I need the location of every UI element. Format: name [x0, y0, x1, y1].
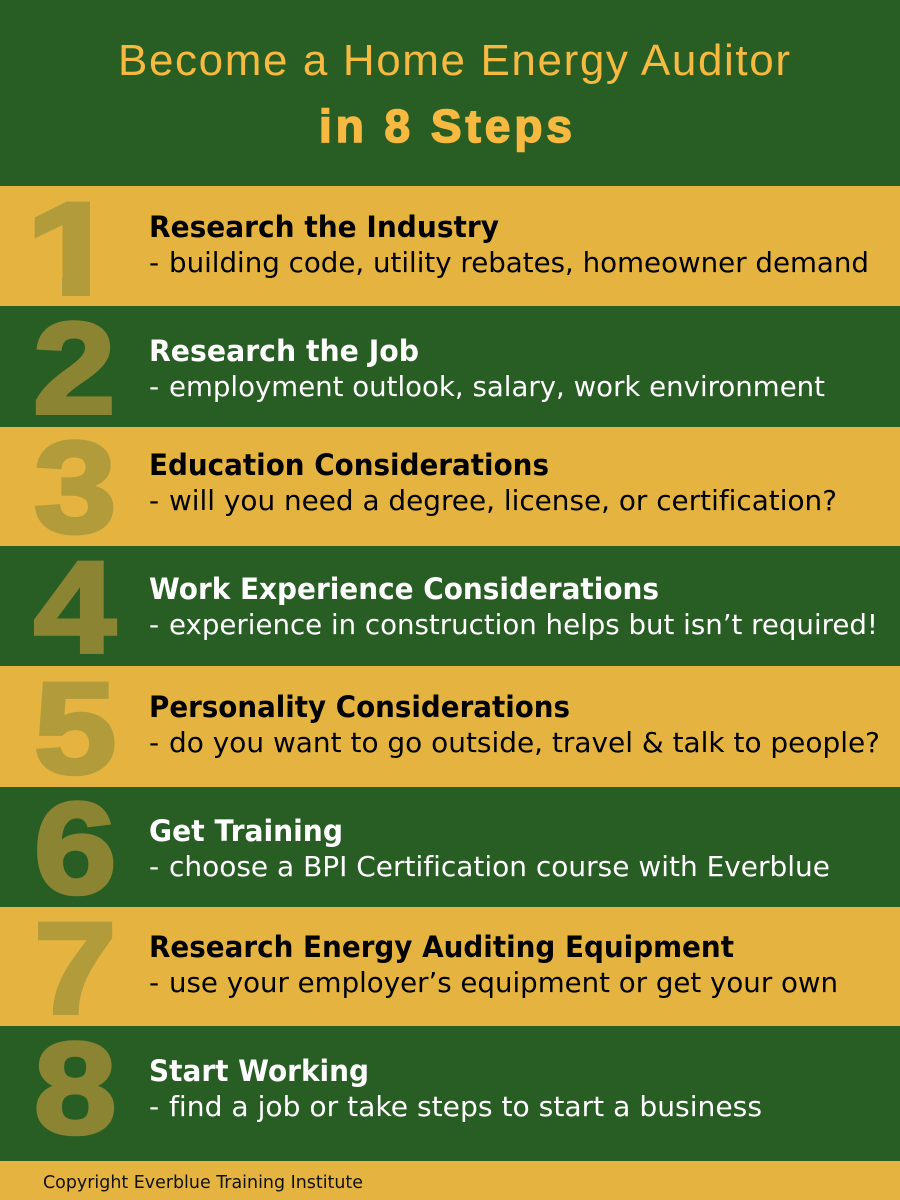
step 8: - — [149, 1090, 159, 1123]
step 5: 5 — [34, 655, 116, 801]
step 4: - — [149, 608, 159, 641]
step 8: Start Working — [149, 1054, 369, 1088]
step 8: find a job or take steps to start a business — [169, 1090, 762, 1123]
step 7: Research Energy Auditing Equipment — [149, 930, 734, 964]
step 5 — [0, 655, 900, 801]
copyright footer: Copyright Everblue Training Institute — [43, 1172, 363, 1193]
step 8 — [0, 1015, 900, 1161]
step 4: 4 — [34, 535, 116, 680]
step 1: - — [149, 246, 159, 279]
step 1: Research the Industry — [149, 210, 499, 244]
step 4: experience in construction helps but isn’t required! — [169, 608, 878, 641]
step 4: Work Experience Considerations — [149, 572, 659, 606]
step 2 — [0, 295, 900, 441]
title: Become a Home Energy Auditor — [118, 36, 790, 85]
step 1: 1 — [27, 177, 121, 322]
step 5: - — [149, 726, 159, 759]
step 1 — [0, 186, 900, 306]
step 2: employment outlook, salary, work environment — [169, 370, 825, 403]
copyright footer — [0, 1161, 900, 1200]
step 3: 3 — [34, 414, 116, 560]
step 3: Education Considerations — [149, 448, 549, 482]
title: in 8 Steps — [319, 100, 572, 152]
step 7 — [0, 895, 900, 1041]
step 4 — [0, 535, 900, 680]
step 3 — [0, 414, 900, 560]
step 2: 2 — [33, 295, 115, 441]
step 5: do you want to go outside, travel & talk to people? — [169, 726, 880, 759]
step 6 — [0, 775, 900, 921]
step 5: Personality Considerations — [149, 690, 570, 724]
step 6: - — [149, 850, 159, 883]
step 3: will you need a degree, license, or certification? — [169, 484, 837, 517]
step 1: building code, utility rebates, homeowner demand — [169, 246, 869, 279]
step 8: 8 — [34, 1015, 116, 1161]
step 6: Get Training — [149, 814, 343, 848]
title — [0, 0, 900, 186]
step 2: - — [149, 370, 159, 403]
step 6: choose a BPI Certification course with Everblue — [169, 850, 830, 883]
step 6: 6 — [34, 775, 116, 921]
step 7: - — [149, 966, 159, 999]
step 2: Research the Job — [149, 334, 419, 368]
step 7: 7 — [34, 895, 116, 1041]
step 7: use your employer’s equipment or get your own — [169, 966, 838, 999]
step 3: - — [149, 484, 159, 517]
